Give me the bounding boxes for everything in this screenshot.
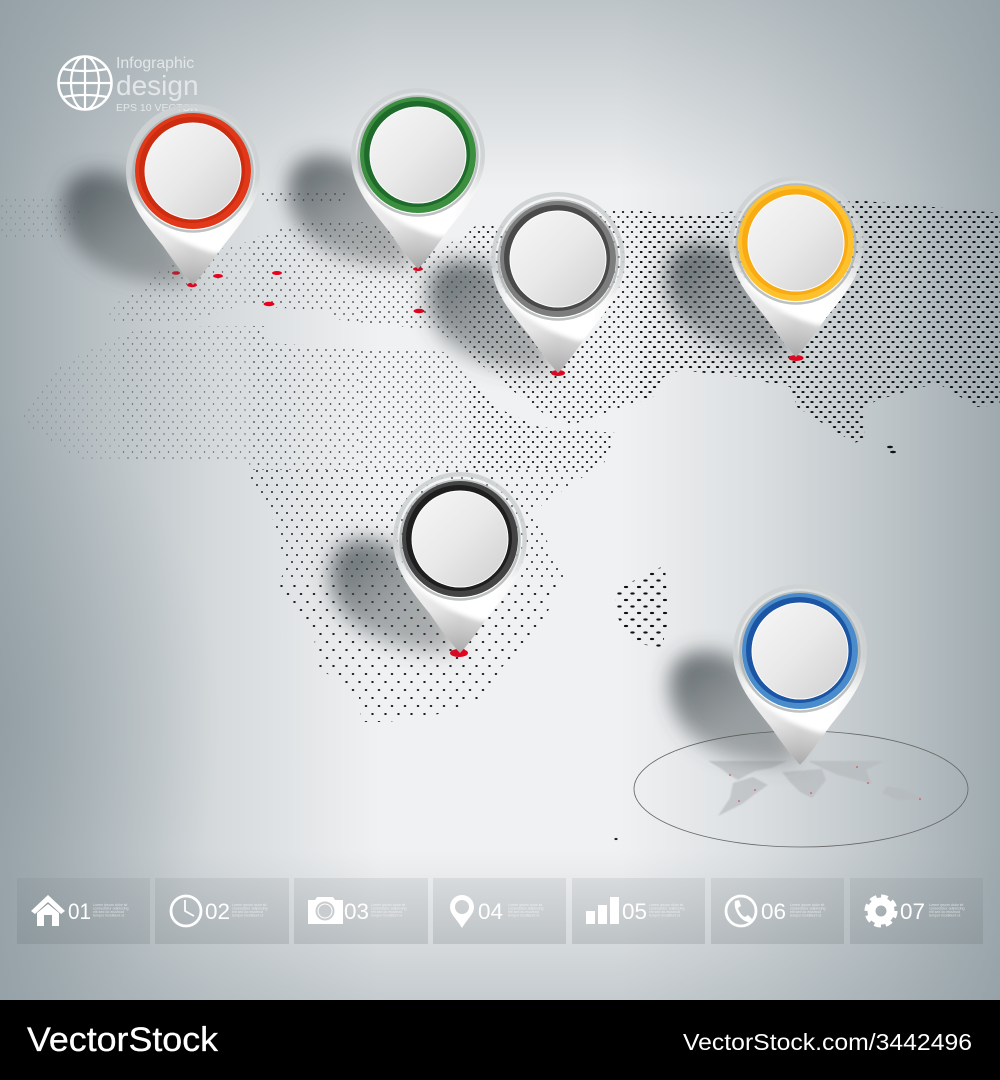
madagascar dots [615, 567, 668, 647]
mini markers [729, 766, 921, 802]
tile 03 camera: tempor incididunt ut [371, 914, 402, 918]
tile 02 clock: elit sed do eiusmod [232, 910, 263, 914]
tile 02 clock: tempor incididunt ut [232, 914, 263, 918]
pin: red [63, 104, 268, 285]
brand name: VectorStock [27, 1021, 219, 1059]
tile 02 clock: consectetur adipiscing [232, 906, 268, 910]
logo [58, 55, 199, 114]
tile 04 location: tempor incididunt ut [508, 914, 539, 918]
dotted world map [0, 180, 1000, 840]
tile 07 gear: elit sed do eiusmod [929, 910, 960, 914]
icon: gear [867, 897, 895, 925]
tile 04 location: 04 [478, 899, 503, 924]
tile 03 camera: elit sed do eiusmod [371, 910, 402, 914]
tile 06 phone: tempor incididunt ut [790, 914, 821, 918]
icon: phone [726, 896, 756, 926]
icon: camera [308, 897, 343, 924]
tile 03 camera: Lorem ipsum dolor sit [371, 903, 405, 907]
tile bar [17, 878, 983, 944]
icon: clock [171, 896, 201, 926]
small world map disc [634, 731, 968, 847]
tile 05 bars: elit sed do eiusmod [649, 910, 680, 914]
tile 06 phone [711, 878, 844, 944]
tile 01 home: tempor incididunt ut [93, 914, 124, 918]
tile 05 bars [572, 878, 705, 944]
tile 06 phone: consectetur adipiscing [790, 906, 826, 910]
tile 03 camera: 03 [344, 899, 369, 924]
tile 02 clock: 02 [205, 899, 230, 924]
icon: bar chart [586, 897, 619, 924]
distant dot [614, 838, 618, 840]
tile 02 clock: Lorem ipsum dolor sit [232, 903, 266, 907]
tile 01 home: Lorem ipsum dolor sit [93, 903, 127, 907]
tile 06 phone: 06 [761, 899, 786, 924]
tile 05 bars: tempor incididunt ut [649, 914, 680, 918]
pin shadow [330, 539, 460, 652]
pin: gray [428, 192, 633, 373]
tile 05 bars: 05 [622, 899, 647, 924]
tile 07 gear: tempor incididunt ut [929, 914, 960, 918]
pin: green [288, 88, 493, 269]
tile 04 location: elit sed do eiusmod [508, 910, 539, 914]
tile 05 bars: consectetur adipiscing [649, 906, 685, 910]
pin shadow [63, 171, 193, 284]
pin shadow [288, 155, 418, 268]
globe icon [58, 56, 112, 110]
tile 06 phone: Lorem ipsum dolor sit [790, 903, 824, 907]
pin shadow [666, 243, 796, 356]
red location markers [172, 267, 804, 657]
tile 01 home: elit sed do eiusmod [93, 910, 124, 914]
pin: blue [670, 584, 875, 765]
tile 02 clock [155, 878, 289, 944]
pin shadow [428, 259, 558, 372]
tile 07 gear: 07 [900, 899, 925, 924]
logo: design [116, 70, 199, 101]
tile 06 phone: elit sed do eiusmod [790, 910, 821, 914]
tile 05 bars: Lorem ipsum dolor sit [649, 903, 683, 907]
tile 01 home [17, 878, 150, 944]
tile 04 location: Lorem ipsum dolor sit [508, 903, 542, 907]
tile 04 location: consectetur adipiscing [508, 906, 544, 910]
mini continents [708, 761, 923, 816]
tile 07 gear: consectetur adipiscing [929, 906, 965, 910]
icon: location pin [450, 895, 474, 928]
tile 03 camera [294, 878, 428, 944]
icon: home [31, 895, 65, 926]
logo text: Infographic [116, 55, 194, 72]
tile 07 gear: Lorem ipsum dolor sit [929, 903, 963, 907]
tile 07 gear [850, 878, 983, 944]
tile 01 home: consectetur adipiscing [93, 906, 129, 910]
pin: yellow [666, 176, 871, 357]
island dots [887, 446, 896, 453]
image url: VectorStock.com/3442496 [683, 1029, 972, 1055]
pin shadow [670, 651, 800, 764]
tile 04 location [433, 878, 566, 944]
tile 03 camera: consectetur adipiscing [371, 906, 407, 910]
watermark footer [0, 1000, 1000, 1080]
tile 01 home: 01 [68, 899, 91, 924]
logo: EPS 10 VECTOR [116, 102, 199, 114]
pin: black [330, 472, 535, 653]
